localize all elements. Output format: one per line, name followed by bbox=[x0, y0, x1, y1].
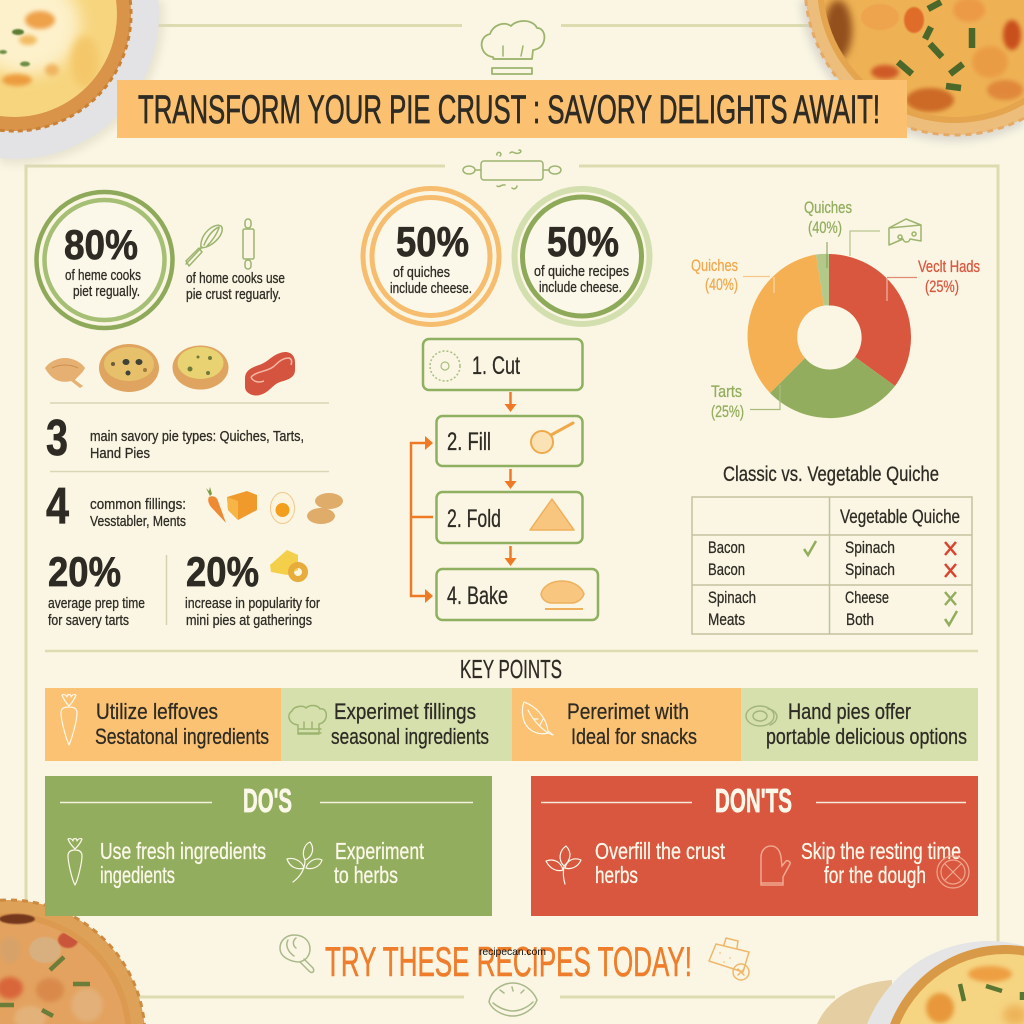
stat: 50% of quiche recipes bbox=[514, 189, 650, 324]
watermark: recipecan.com bbox=[479, 946, 546, 958]
stat: 20% popularity: 20% bbox=[186, 548, 259, 595]
stat: 50% of quiche recipes: 50% bbox=[547, 218, 619, 265]
key point: fillings: Experimet fillings bbox=[334, 699, 476, 724]
stat: 20% popularity: mini pies at gatherings bbox=[186, 613, 312, 629]
stat: 3 pie types: Hand Pies bbox=[90, 445, 150, 462]
arrow: fold to bake bbox=[504, 546, 516, 566]
icon: cheese block bbox=[227, 491, 257, 520]
comparison table: Bacon bbox=[708, 538, 745, 557]
key point: fillings: seasonal ingredients bbox=[331, 724, 489, 749]
step: fold: 2. Fold bbox=[447, 505, 501, 533]
arrow: fill to fold bbox=[504, 469, 516, 489]
key point: hand pies: portable delicious options bbox=[766, 724, 967, 749]
icon: shopping bag bbox=[709, 938, 749, 980]
chart label: quiches orange: (40%) bbox=[705, 276, 738, 294]
step: bake bbox=[436, 569, 598, 620]
segment: vect hads bbox=[829, 254, 911, 386]
panel: don'ts: Overfill the crust bbox=[595, 838, 725, 864]
arrow: return bracket bbox=[411, 436, 433, 603]
stat: 20% popularity bbox=[185, 548, 320, 629]
stat: 3 pie types: main savory pie types: Quiches, Tarts, bbox=[90, 428, 304, 445]
step: fold bbox=[436, 492, 582, 543]
flowchart: pie steps bbox=[411, 339, 598, 620]
icon: rolling pin upright bbox=[243, 219, 254, 269]
comparison table: Spinach bbox=[845, 538, 895, 557]
icon: carrot bbox=[206, 487, 226, 523]
key point: hand pies: Hand pies offer bbox=[788, 699, 911, 724]
chart label: quiches green: Quiches bbox=[804, 199, 852, 217]
photo: quiche on plate, top left bbox=[0, 0, 165, 165]
step: bake: 4. Bake bbox=[447, 582, 508, 610]
chart label: quiches green: (40%) bbox=[808, 219, 842, 237]
stat: 50% of quiches bbox=[363, 188, 499, 324]
photo: quiche, bottom left bbox=[0, 900, 144, 1024]
stat: 50% of quiches: include cheese. bbox=[390, 281, 472, 297]
icon: mushroom quiche bbox=[99, 344, 159, 392]
icon: crossed circle bbox=[937, 856, 969, 888]
icon: chef hat bbox=[482, 21, 544, 74]
panel: do's: ingedients bbox=[100, 862, 175, 888]
panel: don'ts bbox=[531, 776, 978, 916]
icon: herb tart bbox=[172, 346, 228, 390]
icon: mushroom spoon bbox=[280, 935, 314, 972]
photo: quiche on plate and board, bottom right bbox=[817, 941, 1024, 1024]
panel: do's bbox=[45, 776, 492, 916]
stat: 80% of home cooks: 80% bbox=[64, 221, 138, 268]
donut chart: pie types bbox=[748, 254, 911, 418]
title banner bbox=[117, 80, 907, 138]
stat: 20% prep time: average prep time bbox=[48, 596, 145, 612]
key point: fillings bbox=[281, 688, 512, 761]
stat: 80% of home cooks bbox=[36, 192, 172, 328]
icon: mini pies bbox=[307, 493, 343, 524]
key point: snacks: Ideal for snacks bbox=[571, 724, 697, 749]
stat: 20% prep time: for savery tarts bbox=[48, 613, 129, 629]
panel: do's: to herbs bbox=[334, 862, 398, 888]
chart label: vect hads: (25%) bbox=[925, 278, 959, 296]
key point: leftovers: Utilize leffoves bbox=[96, 699, 218, 724]
chart label: tarts bbox=[711, 383, 780, 421]
stat: 4 fillings: 4 bbox=[46, 477, 70, 534]
icon: steak bbox=[245, 352, 295, 396]
chart label: quiches orange bbox=[691, 257, 774, 294]
chart label: vect hads bbox=[887, 258, 980, 301]
comparison table bbox=[692, 497, 972, 634]
chart label: vect hads: Veclt Hads bbox=[918, 258, 980, 276]
icon: red cross second bbox=[945, 564, 956, 577]
stat: 20% popularity: increase in popularity for bbox=[185, 596, 320, 612]
icon: egg bbox=[270, 492, 294, 524]
stat: 4 fillings bbox=[46, 472, 329, 534]
pie icons row bbox=[45, 344, 295, 396]
key point: hand pies bbox=[741, 688, 978, 761]
icon: herb leaves outline bbox=[546, 846, 581, 884]
stat: 80% of home cooks: piet reguaIly. bbox=[73, 284, 140, 300]
heading: comparison: Classic vs. Vegetable Quiche bbox=[723, 463, 939, 486]
panel: don'ts: for the dough bbox=[824, 862, 926, 888]
comparison table: Cheese bbox=[845, 588, 889, 607]
key point: leftovers bbox=[45, 688, 281, 761]
stat: 20% prep time bbox=[48, 548, 145, 629]
stat: 50% of quiche recipes: of quiche recipes bbox=[534, 264, 629, 280]
step: cut: 1. Cut bbox=[472, 352, 520, 380]
key point: snacks: Pererimet with bbox=[567, 699, 689, 724]
comparison table: Both bbox=[846, 610, 874, 629]
key points strip bbox=[45, 688, 978, 761]
heading: key points: KEY POINTS bbox=[460, 654, 562, 684]
stat: 50% of quiches: 50% bbox=[396, 218, 469, 265]
icon: cheese with leader line bbox=[850, 219, 921, 256]
stat: 3 pie types: 3 bbox=[46, 409, 68, 466]
icon: hand pie bbox=[45, 358, 85, 388]
donut hole bbox=[798, 306, 860, 368]
icon: herb leaves bbox=[287, 842, 322, 882]
chart label: tarts: (25%) bbox=[711, 403, 744, 421]
icon: rolling pin bbox=[463, 150, 561, 189]
chart label: tarts: Tarts bbox=[711, 383, 742, 401]
panel: do's: Use fresh ingredients bbox=[100, 838, 266, 864]
panel: don'ts: herbs bbox=[595, 862, 638, 888]
chart label: quiches orange: Quiches bbox=[691, 257, 738, 275]
icon: green cross bbox=[945, 592, 956, 605]
stat: 4 fillings: Vesstabler, Ments bbox=[90, 513, 186, 530]
stat: 20% prep time: 20% bbox=[48, 548, 121, 595]
text: home cooks caption bbox=[186, 271, 285, 303]
call to action: TRY THESE RECIPES TODAY! bbox=[325, 938, 692, 985]
step: fill bbox=[436, 416, 582, 466]
filling icons bbox=[206, 487, 343, 524]
stat: 4 fillings: common fillings: bbox=[90, 496, 186, 513]
stat: 80% of home cooks: of heme cooks bbox=[65, 268, 141, 284]
text: home cooks caption: of home cooks use bbox=[186, 271, 285, 287]
icon: green check second bbox=[945, 611, 957, 625]
panel: do's: DO'S bbox=[243, 782, 292, 819]
comparison table: Spinach bbox=[845, 560, 895, 579]
arrow: cut to fill bbox=[504, 392, 516, 412]
icon: whisk bbox=[186, 225, 222, 266]
stat: 50% of quiches: of quiches bbox=[393, 265, 450, 281]
icon: cheese and ring bbox=[270, 550, 305, 579]
segment: quiches orange bbox=[748, 254, 824, 393]
key point: leftovers: Sestatonal ingredients bbox=[95, 724, 269, 749]
panel: do's: Experiment bbox=[335, 838, 424, 864]
segment: quiches green bbox=[816, 254, 829, 306]
comparison table: Spinach bbox=[708, 588, 756, 607]
chart label: quiches green bbox=[804, 199, 852, 268]
icon: oven mitt bbox=[761, 846, 790, 885]
icon: red cross bbox=[945, 542, 956, 555]
panel: don'ts: DON'TS bbox=[715, 782, 792, 819]
panel: don'ts: Skip the resting time bbox=[801, 838, 961, 864]
key point: snacks bbox=[512, 688, 741, 761]
stat: 3 pie types bbox=[46, 403, 329, 466]
stat: 50% of quiche recipes: include cheese. bbox=[539, 280, 622, 296]
icon: green check bbox=[804, 541, 816, 555]
photo: vegetable quiche, top right bbox=[800, 0, 1024, 141]
comparison table: Meats bbox=[708, 610, 745, 629]
icon: hand pie outline bbox=[489, 983, 537, 1016]
step: fill: 2. Fill bbox=[447, 428, 491, 456]
text: home cooks caption: pie crust reguarly. bbox=[186, 287, 281, 303]
step: cut bbox=[423, 339, 582, 390]
comparison table: Bacon bbox=[708, 560, 745, 579]
comparison table: Vegetable Quiche bbox=[840, 507, 960, 528]
segment: tarts bbox=[770, 357, 895, 418]
icon: carrot outline bbox=[68, 839, 82, 885]
